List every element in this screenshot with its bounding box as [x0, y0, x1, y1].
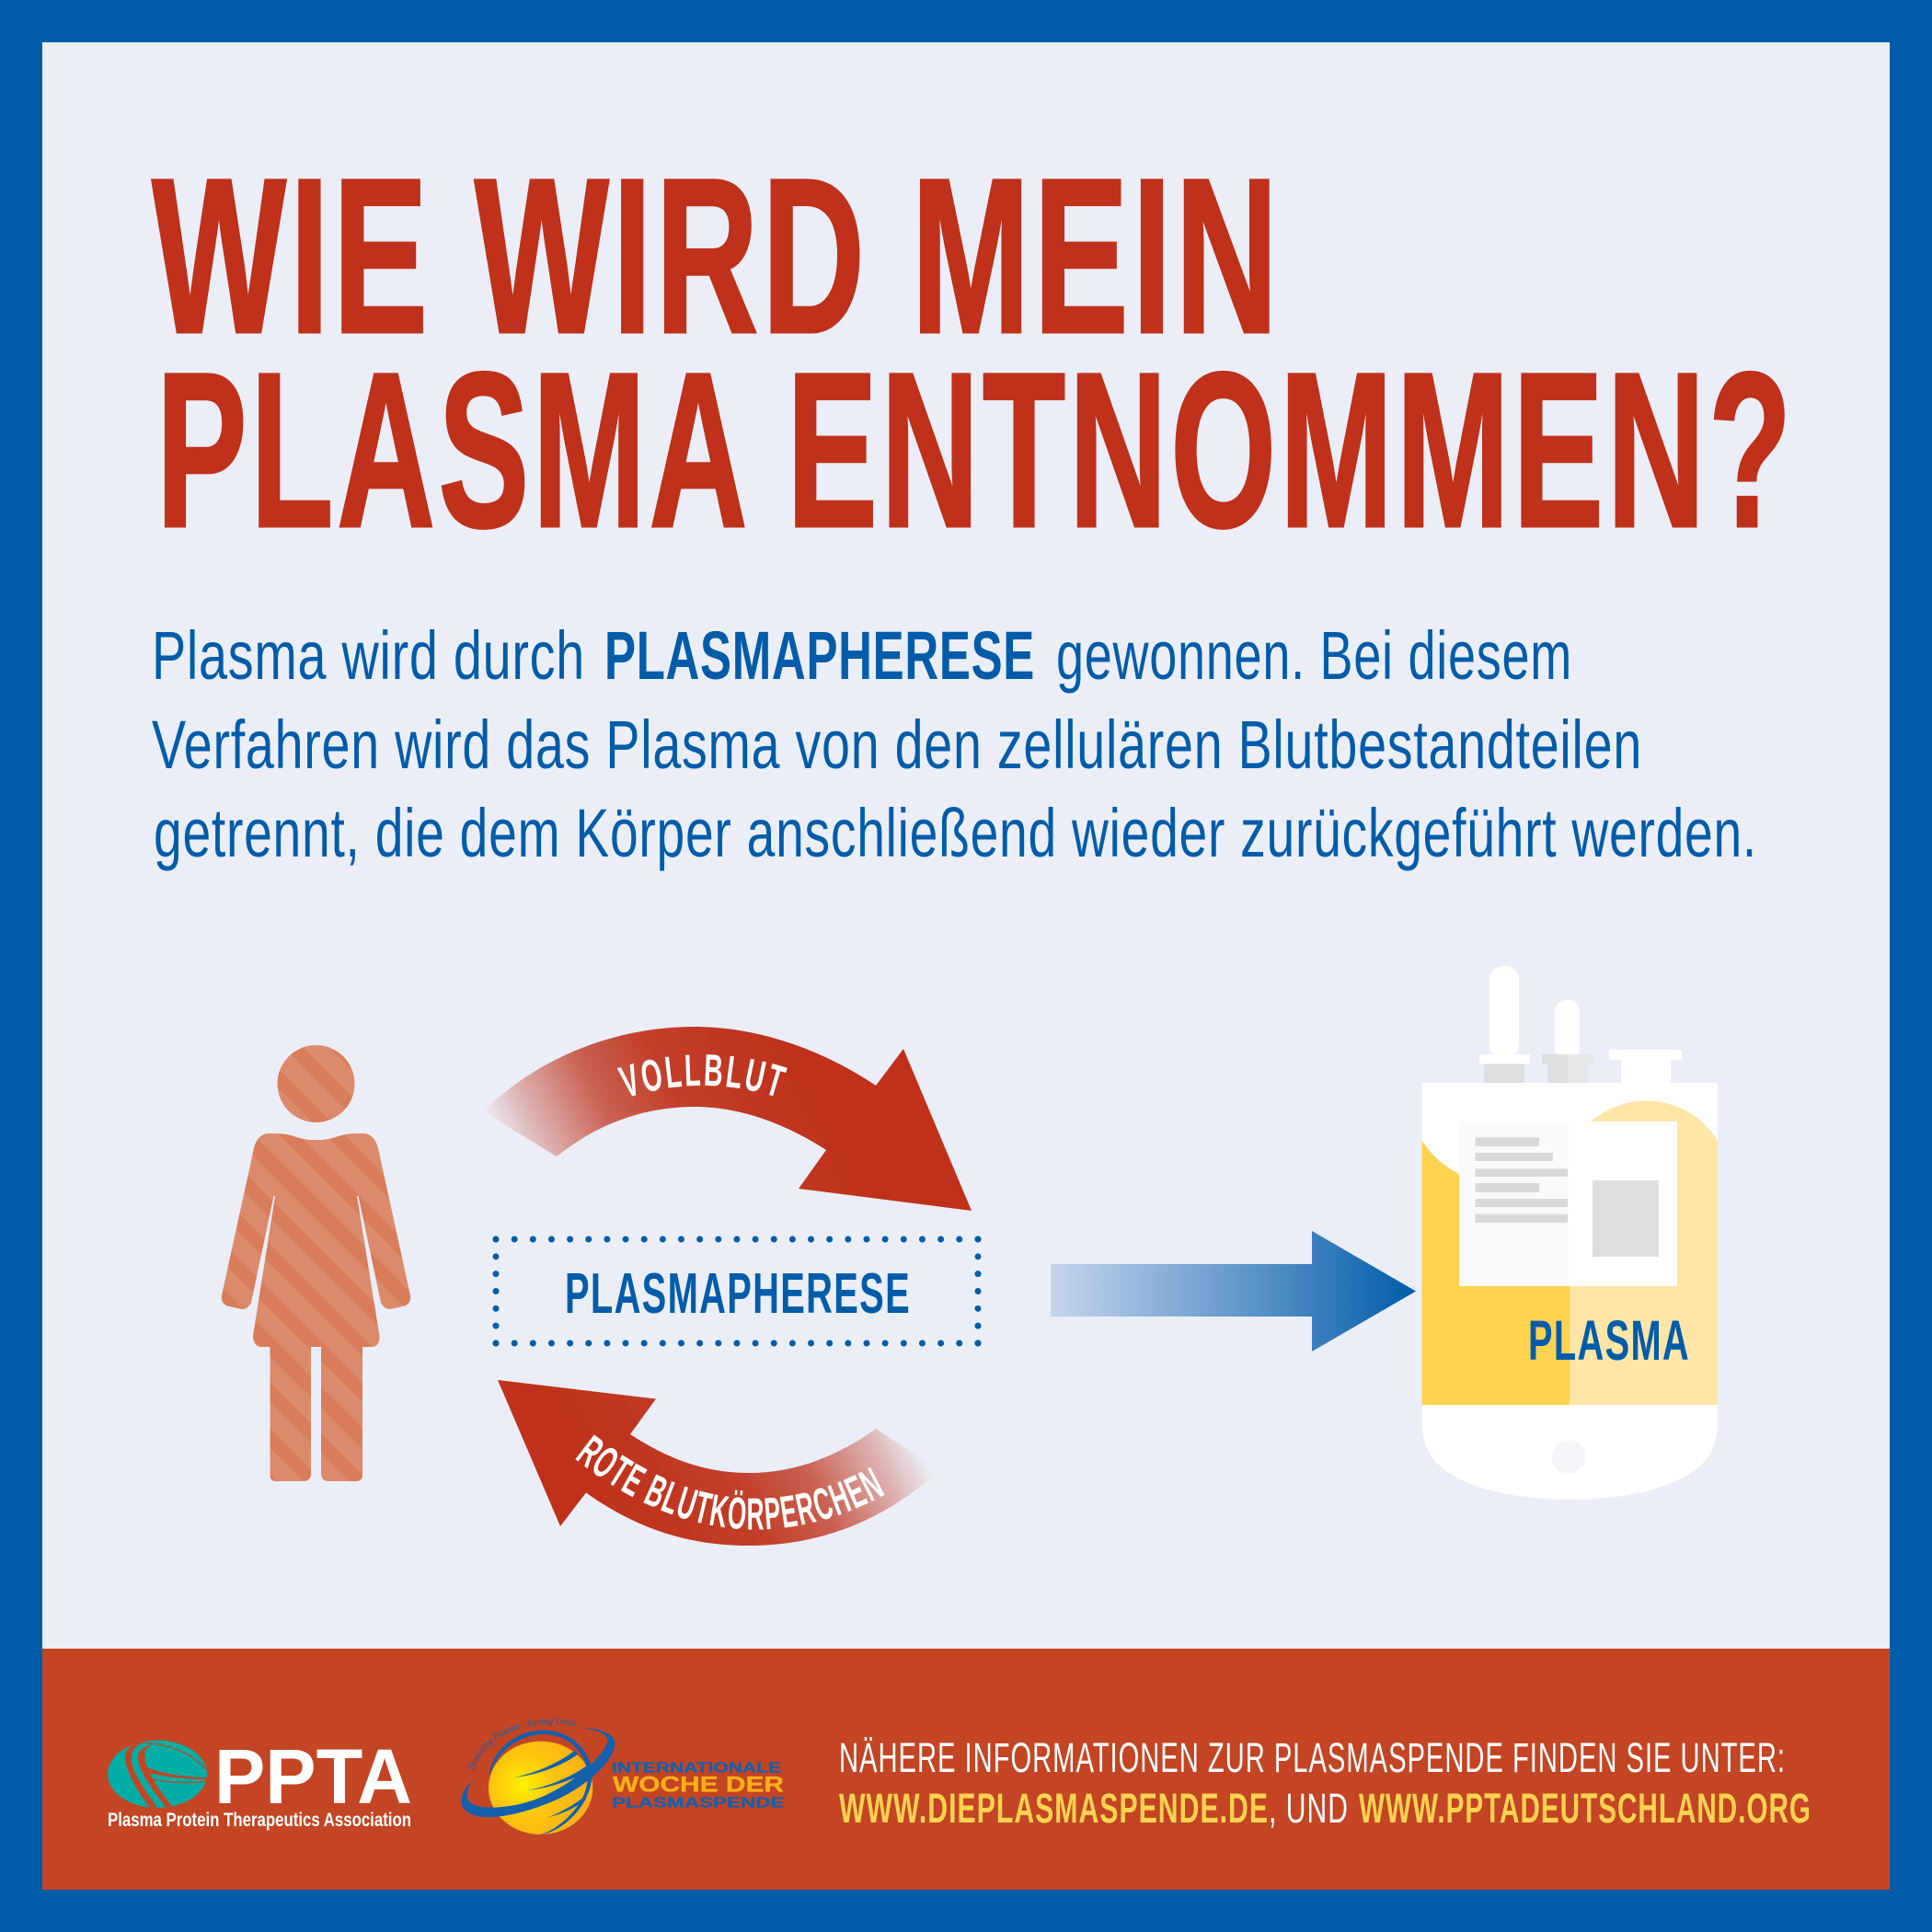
label: rote Blutkörperchen: ROTE BLUTKÖRPERCHEN: [575, 1434, 885, 1529]
intro text block: PLASMAPHERESE: [604, 617, 1035, 694]
footer band: [42, 1649, 1890, 1890]
plasma fill light: [1570, 1100, 1718, 1405]
sun globe: [489, 1742, 592, 1834]
orbit swirl: [461, 1728, 615, 1834]
logo: Internationale Woche der Plasmaspende: [462, 1718, 785, 1834]
intro text block: [152, 617, 1757, 871]
PPTA globe: [108, 1741, 207, 1808]
title: [152, 132, 1795, 573]
footer information text: [839, 1734, 1811, 1832]
logo wordmark: INTERNATIONALE: [612, 1761, 781, 1776]
intro text block: gewonnen. Bei diesem: [1056, 617, 1572, 694]
footer information text: , UND: [1269, 1785, 1349, 1832]
icon: person: [222, 1045, 410, 1481]
logo wordmark: WOCHE DER: [613, 1774, 784, 1798]
logo wordmark: PLASMASPENDE: [612, 1796, 785, 1811]
title: WIE WIRD MEIN: [152, 132, 1282, 379]
arrow: Vollblut: [487, 1027, 972, 1211]
person body: [222, 1133, 410, 1481]
label: Vollblut: VOLLBLUT: [616, 1054, 788, 1097]
bag hole: [1552, 1440, 1585, 1474]
logo: PPTA: [108, 1733, 412, 1831]
arrow: blue to bag: [1051, 1231, 1416, 1351]
bag body: [1422, 1083, 1718, 1500]
icon: plasma bag: [1422, 966, 1718, 1500]
person head: [278, 1045, 355, 1122]
PPTA full name: Plasma Protein Therapeutics Association: [108, 1810, 411, 1831]
plasma fill dark: [1422, 1141, 1570, 1405]
footer information text: WWW.DIEPLASMASPENDE.DE: [839, 1785, 1269, 1832]
arrow: rote Blutkörperchen: [498, 1380, 929, 1546]
PPTA wordmark: PPTA: [214, 1733, 412, 1820]
label: plasma: PLASMA: [1528, 1309, 1690, 1372]
bag tubes: [1479, 966, 1682, 1085]
logo wordmark: [612, 1761, 785, 1811]
tagline: Donating Plasma . Saving Lives: [467, 1718, 576, 1772]
intro text block: Plasma wird durch: [152, 617, 585, 694]
bag label: [1459, 1121, 1677, 1286]
globe and orbit: [462, 1718, 615, 1834]
box: Plasmapherese: PLASMAPHERESE: [565, 1262, 911, 1326]
